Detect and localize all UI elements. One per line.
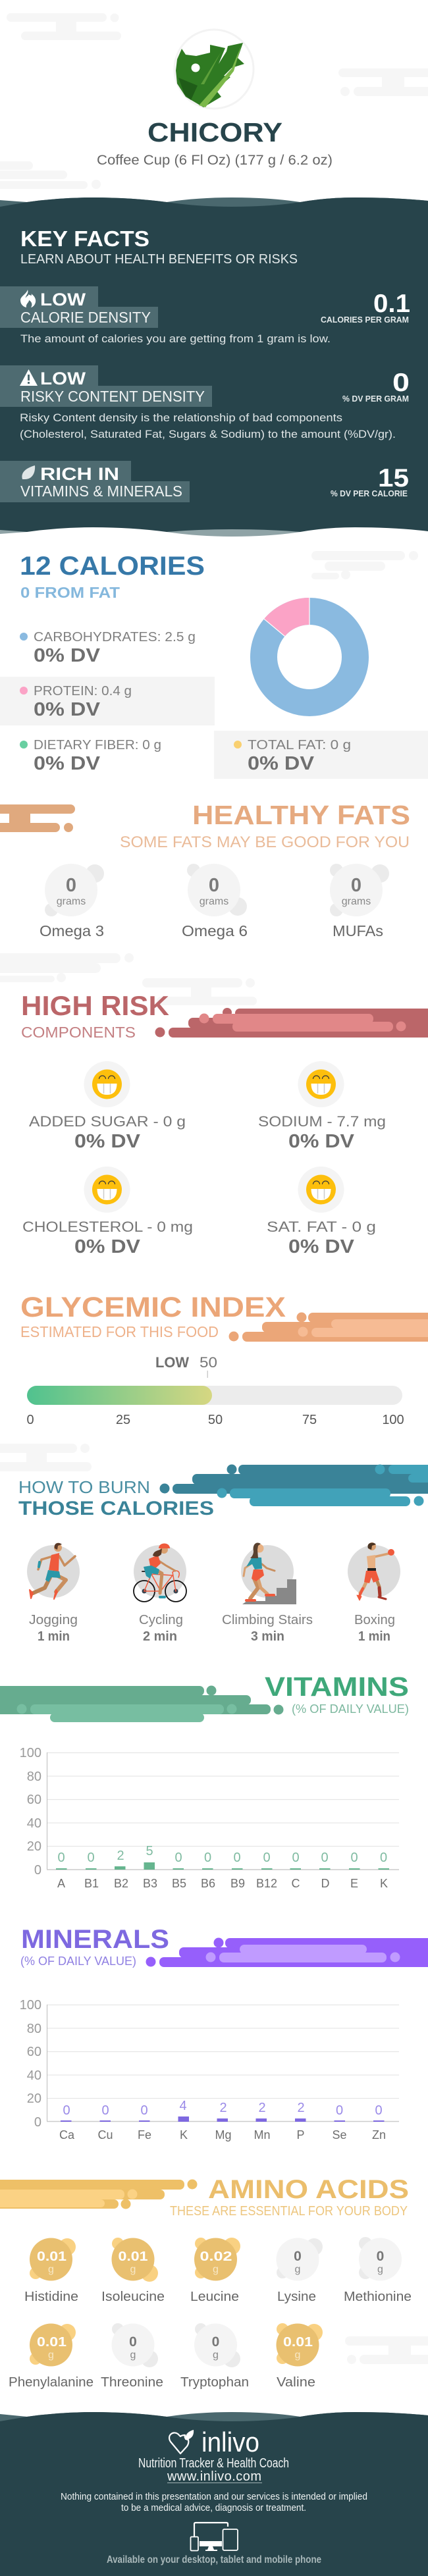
fact: risky content density: LOW [40, 369, 86, 388]
stat: sodium: 0% DV [288, 1131, 355, 1152]
fact: risky content density: % DV PER GRAM [342, 394, 409, 404]
icon: cyclist [134, 1543, 186, 1602]
bar chart: vitamins: K [380, 1877, 388, 1890]
bar chart: minerals: K [180, 2128, 188, 2142]
fact: calorie density: CALORIES PER GRAM [321, 315, 409, 325]
heading: glycemic index: GLYCEMIC INDEX [20, 1292, 286, 1323]
stat: methionine: g [377, 2264, 383, 2275]
stat: added sugar: ADDED SUGAR - 0 g [29, 1113, 186, 1130]
bar chart: vitamins: 0 [87, 1851, 95, 1865]
bar chart: vitamins: C [291, 1877, 300, 1890]
icon: warning triangle [20, 369, 38, 386]
bar chart: vitamins: 0 [380, 1851, 387, 1865]
stat: histidine: g [48, 2264, 54, 2275]
bar chart: minerals: 4 [179, 2099, 187, 2113]
bar chart: minerals: Se [332, 2128, 347, 2142]
stat: valine: g [295, 2350, 300, 2361]
bar chart: vitamins: 80 [27, 1770, 41, 1784]
bar chart: minerals: 0 [375, 2103, 383, 2118]
activity: boxing [348, 1542, 400, 1644]
bar chart: vitamins: 0 [34, 1863, 41, 1878]
stat: omega 3: Omega 3 [40, 922, 104, 939]
bar chart: vitamins [20, 1746, 399, 1890]
stat: lysine: Lysine [277, 2290, 316, 2304]
subheading: estimated: ESTIMATED FOR THIS FOOD [20, 1323, 219, 1340]
icon: stair climber [242, 1542, 296, 1604]
icon: smiling face [92, 1069, 122, 1099]
stat: histidine [24, 2238, 78, 2304]
background cloud: amino acids [345, 2336, 428, 2364]
bar chart: vitamins: 40 [27, 1816, 41, 1831]
availability note: Available on your desktop, tablet and mobile phone [107, 2554, 321, 2565]
stat: MUFAs: 0 [351, 875, 361, 896]
bar chart: minerals: 2 [219, 2101, 227, 2115]
bar chart: minerals: 40 [27, 2068, 41, 2083]
stat: histidine: 0.01 [37, 2249, 67, 2264]
bar chart: vitamins: 60 [27, 1793, 41, 1807]
bar chart: minerals [20, 1998, 399, 2142]
heading: high risk: HIGH RISK [21, 990, 169, 1021]
heading: key facts: KEY FACTS [20, 226, 149, 251]
gauge: glycemic index: 25 [116, 1413, 130, 1427]
bar chart: vitamins: B9 [230, 1877, 245, 1890]
activity: boxing: Boxing [354, 1613, 395, 1627]
panel: healthy fats [0, 800, 410, 939]
stat: valine [277, 2323, 323, 2390]
activity: boxing: 1 min [358, 1629, 390, 1644]
stat: saturated fat [267, 1167, 376, 1257]
bar chart: minerals: 0 [34, 2115, 41, 2130]
stat: sodium: SODIUM - 7.7 mg [258, 1113, 386, 1130]
stat: cholesterol [22, 1167, 193, 1257]
heading: vitamins: VITAMINS [265, 1671, 409, 1702]
serving size subtitle: Coffee Cup (6 Fl Oz) (177 g / 6.2 oz) [97, 153, 333, 168]
stat: omega 6: grams [200, 896, 228, 907]
activity: jogging: Jogging [29, 1613, 78, 1627]
stat: leucine: 0.02 [200, 2249, 232, 2264]
background cloud: burn [0, 1444, 92, 1471]
icon: jogger [30, 1543, 75, 1599]
fact: risky content density: (Cholesterol, Saturated Fat, Sugars & Sodium) to the amount (%DV/gr). [20, 428, 396, 440]
disclaimer [61, 2491, 367, 2513]
fact: calorie density [0, 286, 410, 345]
stat: omega 6 [182, 864, 248, 939]
stat: tryptophan: 0 [212, 2334, 219, 2350]
stat: isoleucine: g [130, 2264, 136, 2275]
bar chart: vitamins: 2 [117, 1849, 124, 1863]
disclaimer: Nothing contained in this presentation and our services is intended or implied [61, 2491, 367, 2502]
activity: climbing stairs: Climbing Stairs [222, 1613, 313, 1627]
legend: total fat [214, 731, 428, 779]
bar chart: vitamins: A [57, 1877, 65, 1890]
stat: tryptophan [180, 2323, 249, 2390]
icon: smiling face [306, 1174, 336, 1205]
logo: inlivo [169, 2427, 259, 2458]
stat: phenylalanine [9, 2324, 94, 2390]
legend: dietary fiber: DIETARY FIBER: 0 g [34, 737, 161, 752]
bar chart: vitamins: B1 [84, 1877, 99, 1890]
icon: smiling face [92, 1174, 122, 1205]
fact: calorie density: 0.1 [373, 290, 410, 318]
fact: calorie density: The amount of calories you are getting from 1 gram is low. [20, 332, 331, 345]
stat: valine: Valine [277, 2375, 315, 2390]
gauge: glycemic index: LOW [155, 1354, 189, 1371]
bar chart: minerals: 80 [27, 2022, 41, 2036]
bar chart: vitamins: 0 [292, 1851, 300, 1865]
stat: omega 6: 0 [209, 875, 219, 896]
bar chart: vitamins: 0 [204, 1851, 211, 1865]
stat: lysine: 0 [294, 2249, 302, 2264]
stat: valine: 0.01 [283, 2335, 313, 2350]
bar chart: vitamins: 0 [263, 1851, 271, 1865]
stat: leucine [190, 2238, 240, 2304]
bar chart: minerals: 0 [101, 2103, 109, 2118]
bar chart: minerals: 0 [140, 2103, 148, 2118]
stat: omega 3: 0 [66, 875, 76, 896]
legend: dietary fiber: 0% DV [34, 753, 101, 774]
subheading: from fat: 0 FROM FAT [20, 584, 120, 601]
gauge: glycemic index [26, 1354, 404, 1427]
bar chart: vitamins: E [350, 1877, 358, 1890]
fact: risky content density: RISKY CONTENT DENSITY [20, 388, 205, 405]
stat: phenylalanine: g [48, 2350, 54, 2361]
bar chart: minerals: P [296, 2128, 305, 2142]
bar chart: vitamins: 0 [321, 1851, 329, 1865]
bar chart: vitamins: 0 [57, 1851, 65, 1865]
stat: tryptophan: Tryptophan [180, 2375, 249, 2390]
legend: total fat: TOTAL FAT: 0 g [248, 737, 351, 752]
decorative band: healthy fats [0, 804, 75, 832]
stat: added sugar [29, 1061, 186, 1152]
stat: tryptophan: g [213, 2350, 219, 2361]
panel: glycemic index [20, 1292, 428, 1427]
decorative band: high risk [155, 1008, 428, 1038]
stat: saturated fat: SAT. FAT - 0 g [267, 1219, 376, 1235]
stat: MUFAs [330, 864, 389, 939]
stat: methionine: 0 [377, 2249, 384, 2264]
stat: threonine: Threonine [101, 2375, 163, 2390]
stat: added sugar: 0% DV [74, 1131, 141, 1152]
panel: minerals [20, 1925, 428, 2142]
icon: devices [191, 2523, 238, 2551]
activity: jogging: 1 min [38, 1629, 70, 1644]
fact: vitamins and minerals: VITAMINS & MINERALS [20, 483, 182, 500]
bar chart: vitamins: 0 [233, 1851, 241, 1865]
stat: MUFAs: grams [342, 896, 371, 907]
legend: carbohydrates: 0% DV [34, 645, 101, 666]
legend: dietary fiber [20, 737, 161, 774]
activity: climbing stairs: 3 min [251, 1629, 284, 1644]
activity: climbing stairs [222, 1542, 313, 1644]
icon: smiling face [306, 1069, 336, 1099]
bar chart: vitamins: B12 [256, 1877, 277, 1890]
activity: cycling: 2 min [143, 1629, 177, 1644]
legend: protein: 0% DV [34, 699, 101, 720]
bar chart: minerals: Fe [138, 2128, 151, 2142]
stat: histidine: Histidine [24, 2290, 78, 2304]
stat: leucine: g [213, 2264, 219, 2275]
panel: amino acids [0, 2175, 412, 2390]
stat: saturated fat: 0% DV [288, 1236, 355, 1257]
icon: boxer [357, 1542, 394, 1600]
stat: methionine [344, 2237, 412, 2304]
fact: calorie density: LOW [40, 290, 86, 309]
bar chart: minerals: Cu [97, 2128, 113, 2142]
subheading: percent daily value: (% OF DAILY VALUE) [20, 1955, 136, 1968]
legend: carbohydrates: CARBOHYDRATES: 2.5 g [34, 629, 196, 644]
fact: risky content density: Risky Content density is the relationship of bad components [20, 411, 342, 424]
decorative band: minerals [146, 1938, 428, 1967]
background clouds: header [0, 13, 428, 189]
gauge: glycemic index: 75 [302, 1413, 317, 1427]
stat: isoleucine: Isoleucine [101, 2290, 165, 2304]
gauge: glycemic index: 100 [382, 1413, 404, 1427]
panel: footer [0, 2412, 428, 2576]
stat: phenylalanine: 0.01 [37, 2335, 67, 2350]
stat: threonine: g [130, 2350, 136, 2361]
activity: cycling: Cycling [139, 1613, 183, 1627]
bar chart: minerals: Zn [372, 2128, 386, 2142]
legend: carbohydrates [20, 629, 196, 666]
website link: www.inlivo.com [167, 2469, 261, 2484]
disclaimer: to be a medical advice, diagnosis or treatment. [121, 2502, 306, 2513]
icon: flame [20, 290, 36, 307]
background clouds: mid [0, 953, 257, 1005]
heading: those calories: THOSE CALORIES [18, 1498, 214, 1519]
bar chart: vitamins: 0 [350, 1851, 358, 1865]
bar chart: minerals: 2 [258, 2101, 266, 2115]
bar chart: vitamins: 0 [174, 1851, 182, 1865]
heading: calories: 12 CALORIES [20, 552, 205, 581]
fact: vitamins and minerals: % DV PER CALORIE [331, 489, 408, 498]
bar chart: minerals: 20 [27, 2091, 41, 2106]
panel: calories [0, 551, 428, 779]
fact: vitamins and minerals: 15 [378, 464, 409, 492]
gauge: glycemic index: 50 [200, 1354, 217, 1371]
bar chart: minerals: 60 [27, 2045, 41, 2059]
bar chart: vitamins: 100 [20, 1746, 41, 1760]
header illustration: chicory leaf [174, 30, 254, 109]
stat: lysine [277, 2238, 323, 2304]
subheading: percent daily value: (% OF DAILY VALUE) [292, 1702, 409, 1716]
stat: threonine [101, 2323, 163, 2390]
fact: risky content density: 0 [392, 369, 410, 397]
gauge: glycemic index: 0 [26, 1413, 34, 1427]
stat: sodium [258, 1061, 386, 1152]
heading: amino acids: AMINO ACIDS [208, 2175, 409, 2204]
bar chart: vitamins: 20 [27, 1839, 41, 1854]
bar chart: vitamins: B2 [114, 1877, 128, 1890]
decorative band: burn [159, 1464, 428, 1506]
gauge: glycemic index: 50 [208, 1413, 223, 1427]
subheading: healthy fats: SOME FATS MAY BE GOOD FOR YOU [120, 833, 410, 851]
stat: omega 3 [40, 864, 104, 939]
stat: omega 6: Omega 6 [182, 922, 248, 939]
fact: risky content density [0, 365, 410, 440]
stat: omega 3: grams [57, 896, 86, 907]
bar chart: minerals: 2 [297, 2101, 305, 2115]
decorative band: vitamins [0, 1685, 283, 1722]
stat: phenylalanine: Phenylalanine [9, 2375, 94, 2390]
panel: high risk components [21, 990, 428, 1257]
legend: protein [0, 677, 215, 725]
bar chart: minerals: 100 [20, 1998, 41, 2012]
bar chart: vitamins: B5 [172, 1877, 186, 1890]
stat: leucine: Leucine [190, 2290, 239, 2304]
bar chart: vitamins: B6 [201, 1877, 215, 1890]
bar chart: minerals: 0 [63, 2103, 70, 2118]
bar chart: minerals: Mg [215, 2128, 232, 2142]
logo: inlivo: inlivo [201, 2427, 259, 2458]
bar chart: vitamins: D [321, 1877, 329, 1890]
heading: minerals: MINERALS [21, 1925, 169, 1954]
panel: vitamins [0, 1671, 409, 1890]
decorative band: glycemic index [229, 1313, 428, 1342]
panel: how to burn those calories [18, 1464, 428, 1644]
fact: vitamins and minerals [0, 461, 409, 502]
stat: cholesterol: 0% DV [74, 1236, 141, 1257]
bar chart: minerals: Mn [254, 2128, 271, 2142]
stat: MUFAs: MUFAs [333, 922, 383, 939]
bar chart: minerals: Ca [59, 2128, 75, 2142]
title: CHICORY [147, 117, 282, 147]
tagline: Nutrition Tracker & Health Coach [138, 2456, 289, 2471]
legend: total fat: 0% DV [248, 753, 315, 774]
bar chart: vitamins: 5 [146, 1844, 153, 1858]
activity: cycling [134, 1543, 186, 1644]
panel: key facts [0, 197, 428, 543]
legend: protein: PROTEIN: 0.4 g [34, 683, 132, 698]
heading: healthy fats: HEALTHY FATS [192, 800, 410, 830]
bar chart: minerals: 0 [336, 2103, 343, 2118]
activity: jogging [27, 1543, 80, 1644]
stat: methionine: Methionine [344, 2290, 412, 2304]
heading: how to burn: HOW TO BURN [18, 1477, 150, 1497]
subheading: components: COMPONENTS [21, 1024, 136, 1041]
stat: threonine: 0 [129, 2334, 137, 2350]
subheading: amino acids: THESE ARE ESSENTIAL FOR YOUR BODY [170, 2204, 408, 2219]
fact: vitamins and minerals: RICH IN [40, 464, 119, 484]
stat: cholesterol: CHOLESTEROL - 0 mg [22, 1219, 193, 1235]
stat: isoleucine [101, 2238, 165, 2304]
decorative band: amino acids [0, 2179, 198, 2209]
stat: lysine: g [295, 2264, 300, 2275]
icon: leaf [22, 465, 35, 479]
subheading: key facts: LEARN ABOUT HEALTH BENEFITS OR RISKS [20, 252, 298, 267]
stat: isoleucine: 0.01 [119, 2249, 147, 2264]
fact: calorie density: CALORIE DENSITY [20, 309, 151, 326]
donut chart [263, 598, 356, 703]
bar chart: vitamins: B3 [143, 1877, 157, 1890]
